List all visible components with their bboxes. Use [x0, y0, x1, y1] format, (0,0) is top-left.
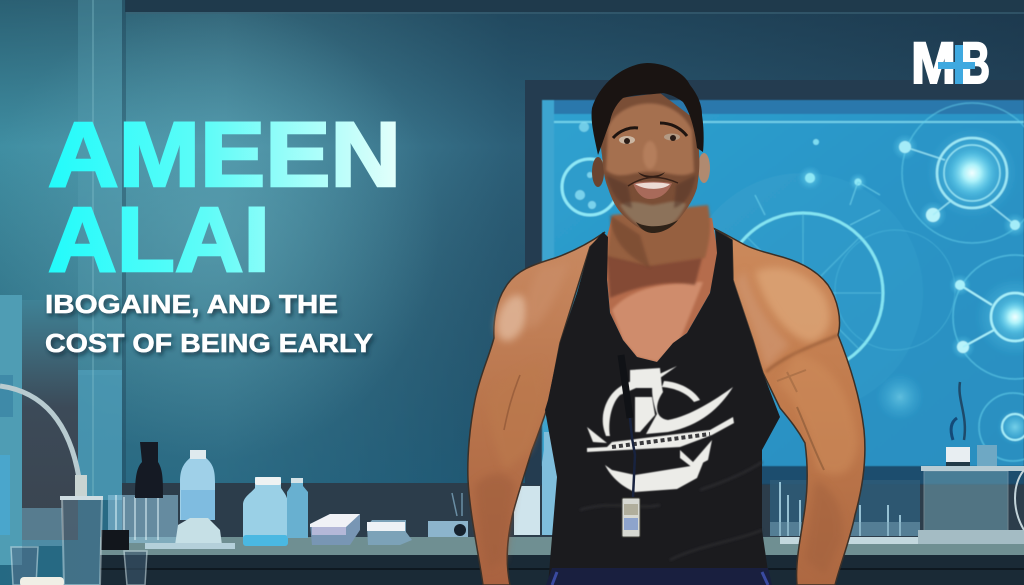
face base: [601, 93, 699, 232]
lab counter: [100, 537, 1024, 585]
black bottle: [135, 442, 163, 498]
hair: [592, 63, 704, 155]
subtitle: IBOGAINE, AND THE: [45, 289, 338, 319]
lanyard: [621, 355, 630, 418]
figure: man in black tank top: [468, 63, 865, 585]
neck and chest skin: [606, 205, 718, 362]
logo: B: [961, 31, 990, 96]
bench items, left: [0, 386, 562, 585]
right arm and shoulder: [713, 228, 865, 585]
brows: [613, 128, 638, 138]
title: ALAI: [48, 189, 270, 291]
window frame: [525, 80, 1024, 485]
left arm and shoulder: [468, 232, 605, 585]
tank top: [545, 230, 780, 585]
subtitle: [45, 289, 373, 358]
badge: [622, 498, 640, 537]
band glyph marks: [612, 434, 710, 447]
head: [592, 63, 710, 233]
nose: [643, 141, 657, 169]
bench glassware behind, right: [770, 480, 920, 536]
tall bottle: [180, 450, 215, 520]
small bottle: [287, 478, 308, 538]
shorts: [546, 568, 772, 585]
title: [48, 104, 401, 291]
jar: [243, 477, 288, 546]
glassware: [22, 495, 178, 546]
bent tube: [0, 386, 79, 478]
ears: [592, 157, 604, 187]
books: [310, 514, 360, 545]
tank folds: [580, 462, 762, 560]
mouth: [633, 182, 672, 199]
goatee: [636, 220, 678, 233]
cheeks lower: [606, 175, 696, 208]
logo: M: [911, 31, 956, 96]
logo: [911, 31, 990, 96]
glowing lab screen: [542, 100, 1024, 484]
beaker: [62, 497, 102, 585]
shirt graphic: [587, 366, 734, 492]
small cylinders: [11, 547, 38, 585]
glass box and instruments, right: [918, 382, 1024, 544]
subtitle: COST OF BEING EARLY: [45, 328, 373, 358]
forehead and cheeks: [606, 103, 694, 175]
small device: [428, 521, 468, 537]
title: AMEEN: [48, 104, 401, 206]
lower wall band: [122, 483, 1024, 541]
left column and side window: [0, 0, 126, 565]
eyes: [619, 136, 635, 144]
stubble: [620, 201, 686, 229]
bottles behind figure: [514, 432, 562, 535]
